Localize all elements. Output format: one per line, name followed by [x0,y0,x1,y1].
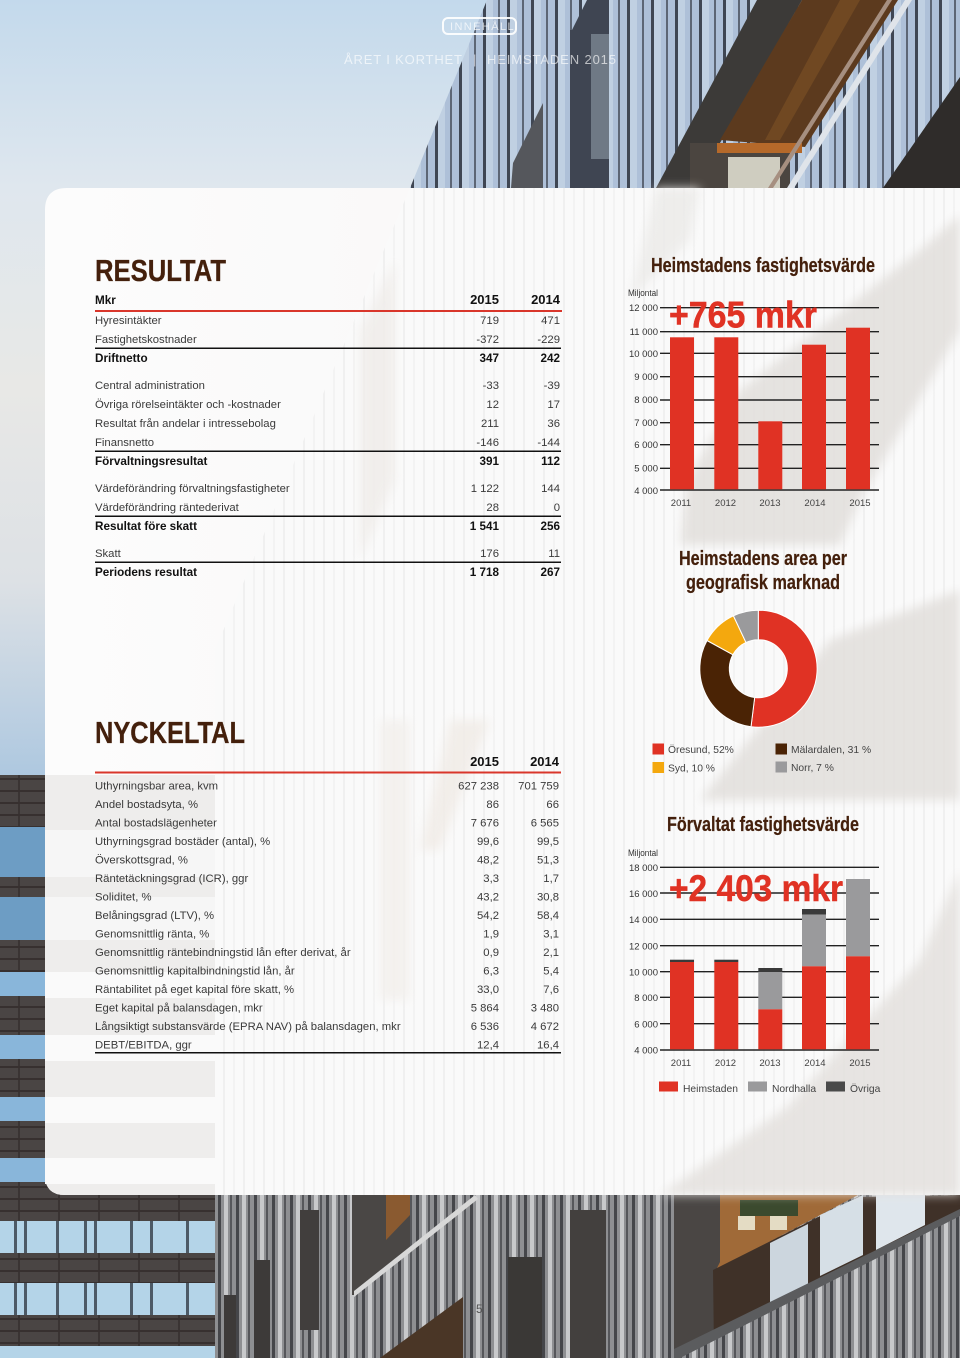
table: Nyckeltal: 12,4 [477,1040,499,1052]
table: Resultat: Förvaltningsresultat [95,455,207,468]
bar chart: Heimstadens fastighetsvärde: 4 000 [634,486,658,497]
table: Resultat: -372 [476,334,499,346]
table: Resultat: 112 [541,455,560,468]
table: Nyckeltal: 48,2 [477,854,499,866]
table: Resultat: Fastighetskostnader [95,334,197,346]
table: Nyckeltal: 1,7 [543,873,559,885]
stacked bar chart: Förvaltat fastighetsvärde: 4 000 [634,1046,658,1056]
table: Nyckeltal: 4 672 [531,1021,559,1033]
table: Resultat: 242 [540,352,560,365]
table: Resultat: 719 [480,315,499,327]
table: Nyckeltal: 7 676 [471,818,499,830]
table: Resultat: Hyresintäkter [95,315,162,327]
table: Resultat: Värdeförändring förvaltningsfastigheter [95,483,290,495]
bar chart: Heimstadens fastighetsvärde: 2015 [849,498,871,509]
table: Nyckeltal: 701 759 [518,780,559,792]
table: Resultat: 0 [554,502,560,514]
table: Nyckeltal: 16,4 [537,1040,559,1052]
donut legend: Syd, 10 % [668,764,715,774]
table: Nyckeltal: 6 536 [471,1021,499,1033]
donut legend: Norr, 7 % [791,763,834,774]
stacked bar legend: Övriga [850,1083,881,1095]
table: Nyckeltal: Genomsnittlig ränta, % [95,928,209,940]
table: Nyckeltal: 1,9 [483,928,499,940]
bar chart: Heimstadens fastighetsvärde: 9 000 [634,372,658,383]
table: Nyckeltal: 30,8 [537,892,559,904]
table: Nyckeltal: 3,3 [483,873,499,885]
table: Nyckeltal: 99,6 [477,836,499,848]
heading: Förvaltat fastighetsvärde: Förvaltat fastighetsvärde [667,814,859,836]
table: Nyckeltal: 86 [486,799,499,811]
table: Resultat: 1 541 [470,520,499,533]
table: Resultat: 28 [486,502,499,514]
table: Nyckeltal: DEBT/EBITDA, ggr [95,1040,192,1052]
stacked bar chart: Förvaltat fastighetsvärde: 2011 [671,1058,691,1069]
table: Resultat: Resultat från andelar i intressebolag [95,418,276,430]
background photo: left dark building [0,775,215,1358]
table: Nyckeltal: 33,0 [477,984,499,996]
table: Resultat: 267 [540,566,560,579]
heading: Heimstadens area per geografisk marknad: geografisk marknad [686,572,840,594]
background photo: lower facade [215,1195,960,1358]
table: Nyckeltal: 3,1 [543,928,559,940]
bar chart: Heimstadens fastighetsvärde: 5 000 [634,464,658,474]
stacked bar chart: Förvaltat fastighetsvärde: Miljontal [628,848,658,859]
table: Nyckeltal: 5 864 [471,1002,499,1014]
table: Resultat: 2014 [531,292,561,307]
stacked bar legend: Heimstaden [683,1084,738,1095]
table: Resultat: Övriga rörelseintäkter och -kostnader [95,399,281,411]
table: Resultat: Värdeförändring räntederivat [95,502,240,514]
table: Nyckeltal: 0,9 [483,947,499,959]
table: Resultat: 2015 [470,292,499,307]
table: Resultat: Resultat före skatt [95,520,197,533]
table: Resultat: 391 [479,455,499,468]
heading: Heimstadens area per geografisk marknad [679,548,847,594]
table: Nyckeltal: Räntetäckningsgrad (ICR), ggr [95,873,248,885]
table: Resultat: -146 [476,437,499,449]
bar chart: Heimstadens fastighetsvärde: 2012 [715,498,736,509]
table: Nyckeltal: 99,5 [537,836,559,848]
table: Nyckeltal: 7,6 [543,984,559,996]
table: Resultat: -144 [537,437,560,449]
background photo: upper facade [410,0,960,188]
table: Nyckeltal: 5,4 [543,966,559,978]
stacked bar chart: Förvaltat fastighetsvärde: 6 000 [634,1020,658,1030]
table: Resultat: Periodens resultat [95,566,197,579]
stacked bar legend [659,1082,881,1095]
table: Nyckeltal: Långsiktigt substansvärde (EPRA NAV) på balansdagen, mkr [95,1021,401,1033]
table: Resultat: -39 [544,380,560,392]
table: Nyckeltal: Belåningsgrad (LTV), % [95,910,214,922]
table: Nyckeltal: 6,3 [483,966,499,978]
table: Nyckeltal: Uthyrningsgrad bostäder (antal), % [95,836,270,848]
heading: Heimstadens area per geografisk marknad: Heimstadens area per [679,548,847,570]
stacked bar chart: Förvaltat fastighetsvärde: 2014 [804,1058,826,1069]
table: Nyckeltal: 51,3 [537,854,559,866]
table: Resultat: Finansnetto [95,437,154,449]
stacked bar chart: Förvaltat fastighetsvärde: 18 000 [629,863,658,874]
stacked bar chart: Förvaltat fastighetsvärde: 2015 [849,1058,871,1069]
bar chart: Heimstadens fastighetsvärde: 2011 [671,498,691,509]
bar chart: Heimstadens fastighetsvärde: 6 000 [634,440,658,451]
stacked bar chart: Förvaltat fastighetsvärde: 16 000 [629,889,658,900]
table: Resultat: Central administration [95,380,205,392]
table: Nyckeltal: 2,1 [543,947,559,959]
table: Nyckeltal: Soliditet, % [95,892,152,904]
bar chart: Heimstadens fastighetsvärde: 2014 [804,498,826,509]
header: contents button [443,18,516,34]
table: Resultat: -33 [483,380,499,392]
table: Nyckeltal: 6 565 [531,818,559,830]
heading: Heimstadens fastighetsvärde: Heimstadens fastighetsvärde [651,255,875,277]
bar chart: Heimstadens fastighetsvärde: 12 000 [629,303,658,314]
header: contents button: INNEHÅLL [450,20,515,33]
table: Nyckeltal: Antal bostadslägenheter [95,818,217,830]
table: Nyckeltal: 2015 [470,754,499,769]
page number: 5 [476,1302,483,1316]
table: Nyckeltal: Genomsnittlig räntebindningstid lån efter derivat, år [95,947,351,959]
heading: Resultat: RESULTAT [95,253,226,288]
table: Resultat: 471 [541,315,560,327]
table: Nyckeltal: 2014 [530,754,560,769]
table: Nyckeltal: Uthyrningsbar area, kvm [95,780,218,792]
bar chart: Heimstadens fastighetsvärde: 2013 [759,498,781,509]
table: Resultat: 1 718 [470,566,499,579]
bar chart: Heimstadens fastighetsvärde: +765 mkr [669,294,817,336]
table: Resultat: 144 [541,483,560,495]
donut chart: area per market [700,610,817,727]
heading: Nyckeltal: NYCKELTAL [95,715,245,750]
bar chart: Heimstadens fastighetsvärde: 11 000 [630,327,658,338]
table: Resultat: 1 122 [471,483,499,495]
bar chart: Heimstadens fastighetsvärde: Miljontal [628,288,658,299]
table: Nyckeltal: 627 238 [458,780,499,792]
table: Nyckeltal: 66 [546,799,559,811]
table: Resultat: Skatt [95,548,122,560]
table: Nyckeltal: 43,2 [477,892,499,904]
donut legend [652,744,871,774]
table: Nyckeltal [95,754,561,1054]
table: Resultat: 347 [479,352,499,365]
table: Nyckeltal: Genomsnittlig kapitalbindningstid lån, år [95,966,295,978]
donut legend: Mälardalen, 31 % [791,745,871,756]
donut legend: Öresund, 52% [668,744,734,756]
table: Resultat: -229 [537,334,560,346]
header: section line: ÅRET I KORTHET [344,52,462,67]
table: Nyckeltal: Eget kapital på balansdagen, mkr [95,1002,263,1014]
background photo: sky [0,0,960,775]
stacked bar chart: Förvaltat fastighetsvärde: 8 000 [634,993,658,1004]
header: section line: HEIMSTADEN 2015 [487,52,616,67]
stacked bar chart: Förvaltat fastighetsvärde [628,848,879,1069]
bar chart: Heimstadens fastighetsvärde [628,288,879,509]
bar chart: Heimstadens fastighetsvärde: 10 000 [629,349,658,360]
table: Resultat: 12 [486,399,499,411]
table: Resultat: 256 [540,520,560,533]
table: Resultat: 176 [480,548,499,560]
white panel background [45,188,960,1195]
stacked bar chart: Förvaltat fastighetsvärde: 2013 [759,1058,781,1069]
stacked bar chart: Förvaltat fastighetsvärde: +2 403 mkr [669,868,843,909]
table: Resultat: 211 [481,418,499,430]
bar chart: Heimstadens fastighetsvärde: 7 000 [634,418,658,429]
stacked bar chart: Förvaltat fastighetsvärde: 10 000 [629,968,658,978]
table: Resultat: 17 [547,399,560,411]
stacked bar chart: Förvaltat fastighetsvärde: 12 000 [629,942,658,952]
table: Resultat: Mkr [95,294,116,307]
table: Resultat: Driftnetto [95,352,148,365]
table: Nyckeltal: 54,2 [477,910,499,922]
stacked bar chart: Förvaltat fastighetsvärde: 2012 [715,1058,736,1069]
table: Nyckeltal: Andel bostadsyta, % [95,799,198,811]
table: Nyckeltal: Överskottsgrad, % [95,854,188,866]
table: Nyckeltal: 58,4 [537,910,559,922]
table: Nyckeltal: Räntabilitet på eget kapital före skatt, % [95,984,294,996]
stacked bar chart: Förvaltat fastighetsvärde: 14 000 [629,915,658,926]
table: Resultat: 11 [548,548,560,560]
header: section line [344,52,616,67]
bar chart: Heimstadens fastighetsvärde: 8 000 [634,395,658,406]
header: section line: | [473,52,476,67]
table: Nyckeltal: 3 480 [531,1002,559,1014]
table: Resultat: 36 [547,418,560,430]
stacked bar legend: Nordhalla [772,1084,816,1095]
table: Resultat [95,292,562,579]
